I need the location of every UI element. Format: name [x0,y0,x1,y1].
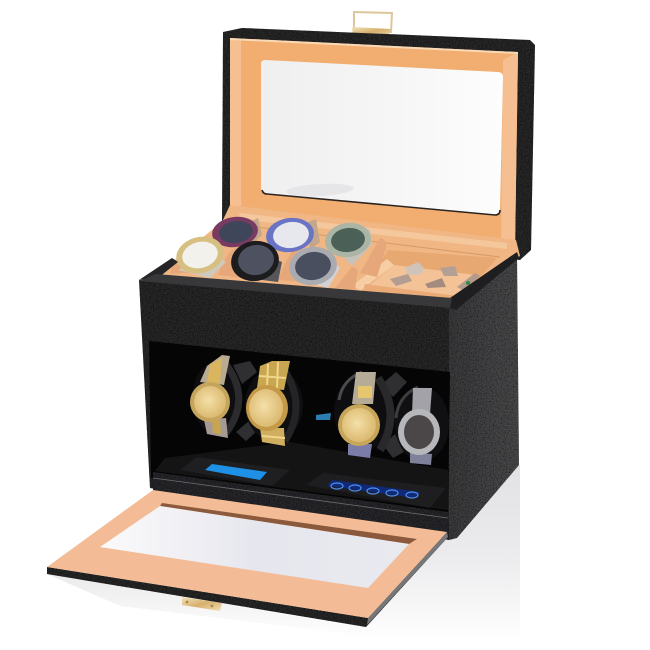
door leather edge [47,532,448,627]
opening [149,341,450,514]
strap [200,355,230,385]
blue reflection [316,413,331,420]
tray watch: white blue bezel [264,215,320,255]
winder watch 3 [334,372,392,458]
door window recess [160,503,417,544]
winder interior [155,361,448,510]
tray floor [158,205,520,302]
winder watch 2 [245,361,303,446]
lid [222,28,535,260]
tray watch: black bezel [228,237,282,285]
grey diamonds [233,361,407,458]
front leather [139,280,449,540]
tray watch: gold white [172,232,228,278]
lid peach lining [230,38,518,250]
cushion [395,387,449,461]
watch pillows [170,238,386,290]
lid inner lip [230,38,518,250]
control panel: display [180,457,290,486]
control panel: touch buttons [306,473,446,508]
box side panel [449,254,519,540]
accessory tray [158,205,520,302]
tray watch: silver [286,243,340,289]
blue display [205,464,267,480]
bottom leather strip [153,472,448,532]
door peach lining [47,490,447,618]
top band [139,274,452,308]
winder floor [155,442,448,510]
lid leather shell [222,28,535,260]
door latch [182,597,222,611]
cushion [245,369,303,441]
winder watch 1 [190,355,242,438]
tray watch: red navy bezel [210,214,262,250]
lid glass window [261,60,503,215]
tray watch: green bezel [323,220,373,266]
left rim [139,258,178,280]
strap [412,388,432,414]
lid clasp [352,12,392,37]
blue button strip [327,480,420,498]
box front panel [139,258,452,540]
cufflinks [390,262,480,291]
cushion [334,374,392,450]
tray back wall [238,213,507,249]
ring compartment [366,265,476,298]
winder watch 4 [395,387,449,465]
strap [352,372,376,404]
side rim [450,252,519,310]
watches in tray [172,214,373,289]
door [47,490,448,627]
strap [257,361,290,390]
door glass window [100,506,409,588]
cushion [192,362,242,434]
floor shadow [47,465,520,640]
